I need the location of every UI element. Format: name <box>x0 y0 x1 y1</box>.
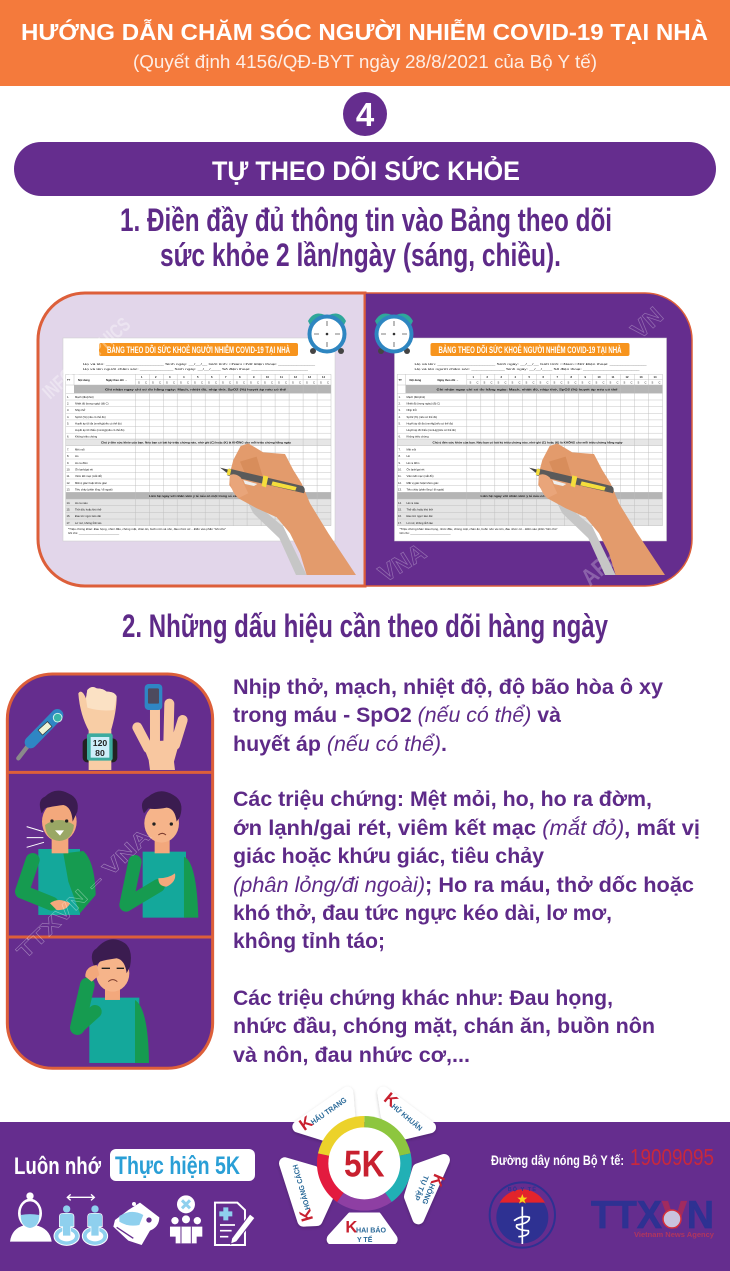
form table left: Tiêu chảy (phân lỏng / đi ngoài) <box>75 488 113 492</box>
form table right: 3 <box>500 375 502 379</box>
petal: Khai báo y tế <box>333 1217 392 1244</box>
watermark left panel: INFOGRAPHICS <box>39 314 135 404</box>
icon: no gathering <box>170 1195 202 1243</box>
form table left: 4 <box>183 375 185 379</box>
5K reminder: Luôn nhớ <box>14 1153 102 1180</box>
form table left: 7 <box>225 375 227 379</box>
form table left: 3. <box>67 408 69 412</box>
petal: Không tụ tập: TỤ TẬP <box>412 1174 431 1202</box>
illustration: person coughing <box>22 791 96 915</box>
form table left: Mất vị giác hoặc khứu giác <box>75 481 108 485</box>
petal: Khai báo y tế: K <box>345 1218 357 1237</box>
text block: symptoms: giác hoặc khứu giác, tiêu chảy <box>233 845 544 868</box>
text block: symptoms <box>233 788 700 953</box>
text block: symptoms: không tỉnh táo; <box>233 930 385 953</box>
form table right: Ngày theo dõi → <box>438 378 459 382</box>
form table left: 15. <box>66 508 70 512</box>
icon: fingertip oximeter <box>137 684 183 770</box>
icon: wrist blood pressure monitor: 120 <box>93 738 107 748</box>
form table right: Ho <box>406 454 410 458</box>
form table right: SpO2 (%) (nếu có thể đo) <box>406 415 437 419</box>
icon: hand washing <box>113 1202 159 1245</box>
form table right: 8 <box>570 375 572 379</box>
form table left: Ớn lạnh/gai rét <box>75 466 93 472</box>
form table left: 9 <box>253 375 255 379</box>
icon: health declaration <box>215 1203 255 1245</box>
form table right: Lơ mơ, không tỉnh táo <box>406 521 433 525</box>
panel: symptom illustrations <box>7 674 213 1068</box>
form table left: 11. <box>66 474 70 478</box>
form table left: BẢNG THEO DÕI SỨC KHOẺ NGƯỜI NHIỄM COVID-19 TẠI NHÀ <box>107 344 290 356</box>
form table right: 10 <box>598 375 601 379</box>
logo: Ministry of Health: BỘ Y TẾ <box>508 1185 537 1193</box>
form table left: 16. <box>66 514 70 518</box>
watermark right panel: VNA <box>374 538 431 588</box>
text block: vital signs: huyết áp (nếu có thể). <box>233 733 447 756</box>
section banner: TỰ THEO DÕI SỨC KHỎE <box>212 154 520 186</box>
form table right: 12 <box>626 375 629 379</box>
form table left: Đau tức ngực kéo dài <box>75 514 101 518</box>
form table left: Chú ý đến sức khỏe của bạn. Nếu bạn có bất kỳ triệu chứng nào, nhớ ghi (C) hoặc (K) là KHÔNG cho mỗi triệu chứng hằng ngày <box>101 440 292 444</box>
form table right: 9. <box>398 461 401 465</box>
form table left: SpO2 (%) (nếu có thể đo) <box>75 415 106 419</box>
form table right: 5 <box>528 375 530 379</box>
petal: Không tụ tập: HÔNG <box>420 1182 437 1206</box>
form table right: 7 <box>556 375 558 379</box>
form table right: 2 <box>486 375 488 379</box>
petal: Khẩu trang: HẨU TRANG <box>309 1095 348 1127</box>
form table right: 5. <box>398 422 401 426</box>
heading 1 <box>120 202 612 273</box>
form table right: Ghi nhận ngay chỉ số đo hằng ngày: Mạch, nhiệt độ, nhịp thở, SpO2 (%) huyết áp nếu có thể <box>436 386 618 392</box>
icon: wrist blood pressure monitor <box>78 687 117 770</box>
hotline: Đường dây nóng Bộ Y tế: <box>491 1152 624 1168</box>
illustration: person with flushed face <box>126 791 198 918</box>
form table right <box>394 338 666 541</box>
petal: Khẩu trang: K <box>295 1112 316 1135</box>
text block: other symptoms: Các triệu chứng khác như: Đau họng, <box>233 987 613 1010</box>
form table right: Đau tức ngực kéo dài <box>406 514 433 518</box>
form table left: 4. <box>67 415 69 419</box>
form table right: 14. <box>398 501 402 505</box>
form table left: 12 <box>294 375 297 379</box>
form table right: 3. <box>398 408 401 412</box>
form table left: Lơ mơ, không tỉnh táo <box>75 521 102 525</box>
form table right: Ghi chú: ___________________________ <box>400 531 451 535</box>
hotline <box>491 1144 714 1170</box>
form table left: Ho ra đờm <box>75 461 89 465</box>
icon: wrist blood pressure monitor: 80 <box>95 748 105 758</box>
form table left: *Triệu chứng khác: Đau họng, nhức đầu, chóng mặt, chán ăn, buồn nôn và nôn, đau nhức cơ... Điền vào phần "Ghi chú" <box>68 527 226 531</box>
form table left: 13. <box>66 488 70 492</box>
form table right: 1. <box>398 395 401 399</box>
petal: Khử khuẩn <box>380 1089 430 1134</box>
form table left: Không triệu chứng <box>75 434 98 438</box>
icons: 5K actions <box>10 1192 255 1245</box>
petal: Không tụ tập: K <box>426 1171 449 1190</box>
form table right: 2. <box>398 402 401 406</box>
form table right: Huyết áp tối thiểu (mmHg)(nếu có thể đo) <box>406 428 456 432</box>
form table left: 9. <box>67 461 69 465</box>
petal: Khẩu trang <box>295 1089 350 1135</box>
logo: TTXVN: TTXVN <box>591 1194 714 1237</box>
form table right: Chú ý đến sức khỏe của bạn. Nếu bạn có bất kỳ triệu chứng nào, nhớ ghi (C) hoặc (K) là KHÔNG cho mỗi triệu chứng hằng ngày <box>432 440 623 444</box>
clock left <box>308 313 346 354</box>
panel: afternoon form <box>365 293 692 591</box>
form table right: 13. <box>398 488 402 492</box>
header band <box>0 0 730 86</box>
form table left: Họ và tên người chăm sóc: _____________ Sinh ngày: __/__/____ Số điện thoại: ______________________ <box>83 367 309 371</box>
5K reminder: Thực hiện 5K <box>115 1152 240 1180</box>
form table right: SCSCSCSCSCSCSCSCSCSCSCSCSCSC <box>470 380 660 384</box>
petal: Không tụ tập <box>410 1160 449 1218</box>
ring <box>317 1116 412 1211</box>
form table right: 4. <box>398 415 401 419</box>
form table left: 10. <box>66 468 70 472</box>
form table left: 1 <box>141 375 143 379</box>
form table right: Nhiệt độ (trong ngày) (độ C) <box>406 402 440 406</box>
form table left <box>63 338 335 541</box>
form table left: 17. <box>66 521 70 525</box>
form table left: 3 <box>169 375 171 379</box>
form table right: Huyết áp tối đa (mmHg)(nếu có thể đo) <box>406 422 453 426</box>
form table left: Liên hệ ngay với nhân viên y tế nếu có một trong số các triệu chứng: <box>149 494 259 498</box>
form table right: 16. <box>398 514 402 518</box>
petal: Khai báo y tế: HAI BÁO <box>356 1226 386 1235</box>
form table right: Họ và tên: ______________________ Sinh ngày: __/__/__ Giới tính: □Nam □Nữ Điện thoại: ______________ <box>414 362 647 366</box>
panel: morning form <box>38 293 365 586</box>
form table left: 11 <box>280 375 283 379</box>
form table right: BẢNG THEO DÕI SỨC KHOẺ NGƯỜI NHIỄM COVID-19 TẠI NHÀ <box>438 344 622 356</box>
text block: symptoms: (phân lỏng/đi ngoài) ; Ho ra máu, thở dốc hoặc <box>233 874 694 897</box>
form table left: 12. <box>66 481 70 485</box>
form table right: TT <box>398 378 402 382</box>
text block: symptoms: Các triệu chứng: Mệt mỏi, ho, ho ra đờm, <box>233 788 652 811</box>
form table right: Mất vị giác hoặc khứu giác <box>406 481 439 485</box>
form table left: Huyết áp tối thiểu (mmHg)(nếu có thể đo) <box>75 428 125 432</box>
form table right: 8. <box>398 454 401 458</box>
form table right: Ho ra đờm <box>406 461 420 465</box>
form table left: Ghi nhận ngay chỉ số đo hằng ngày: Mạch, nhiệt độ, nhịp thở, SpO2 (%) huyết áp nếu có thể <box>105 386 287 392</box>
form table right: 15. <box>398 508 402 512</box>
form table left: Mạch (lần/phút) <box>75 395 94 399</box>
form table right: 9 <box>584 375 586 379</box>
hotline: 19009095 <box>630 1144 714 1170</box>
form table right: Nhịp thở <box>406 408 417 412</box>
form table right: Mạch (lần/phút) <box>406 395 425 399</box>
footer band <box>0 1122 730 1271</box>
subtitle: (Quyết định 4156/QĐ-BYT ngày 28/8/2021 của Bộ Y tế) <box>133 52 597 72</box>
logo: Ministry of Health <box>490 1182 555 1248</box>
form table left: Nhiệt độ (trong ngày) (độ C) <box>75 402 109 406</box>
form table right: 6 <box>542 375 544 379</box>
form table right: Họ và tên người chăm sóc: _____________ Sinh ngày: __/__/____ Số điện thoại: ______________________ <box>414 367 640 371</box>
hand with pen right <box>529 443 665 575</box>
form table left: 8. <box>67 454 69 458</box>
form table left: 14 <box>322 375 325 379</box>
form table left: 13 <box>308 375 311 379</box>
form table left: Nhịp thở <box>75 408 86 412</box>
form table right: Ớn lạnh/gai rét <box>406 466 425 472</box>
text block: symptoms: khó thở, đau tức ngực kéo dài, lơ mơ, <box>233 902 612 925</box>
text block: other symptoms: và nôn, đau nhức cơ,... <box>233 1044 470 1067</box>
text block: vital signs <box>233 676 663 756</box>
form table right: 1 <box>472 375 474 379</box>
form table left: Viêm kết mạc (mắt đỏ) <box>75 473 102 478</box>
form table left: 2. <box>67 402 69 406</box>
form table right: Ho ra máu <box>406 501 420 505</box>
form table left: SCSCSCSCSCSCSCSCSCSCSCSCSCSC <box>138 380 329 384</box>
hand with pen left <box>220 443 356 575</box>
form table right: 17. <box>398 521 402 525</box>
number badge 4: 4 <box>356 96 375 133</box>
petal: Khoảng cách: K <box>295 1207 317 1224</box>
form table left: Ho ra máu <box>75 501 88 505</box>
text block: symptoms: ớn lạnh/gai rét, viêm kết mạc (mắt đỏ), mất vị <box>233 817 700 840</box>
form table left: Huyết áp tối đa (mmHg)(nếu có thể đo) <box>75 422 122 426</box>
form table left: Ho <box>75 454 79 458</box>
text block: other symptoms: nhức đầu, chóng mặt, chán ăn, buồn nôn <box>233 1015 655 1038</box>
form table left: 6. <box>67 434 69 438</box>
petal: Khoảng cách: HOẢNG CÁCH <box>291 1163 312 1211</box>
petal: Khử khuẩn: HỬ KHUẨN <box>390 1102 424 1133</box>
form table left: 10 <box>266 375 269 379</box>
ring: 5K <box>344 1143 385 1185</box>
text block: vital signs: Nhịp thở, mạch, nhiệt độ, độ bão hòa ô xy <box>233 676 663 699</box>
form table right: Thở dốc hoặc khó thở <box>406 508 433 512</box>
number badge 4 <box>343 92 387 136</box>
form table right: Không triệu chứng <box>406 434 429 438</box>
form table right: Nội dung <box>410 378 422 382</box>
form table right: *Triệu chứng khác: Đau họng, nhức đầu, chóng mặt, chán ăn, buồn nôn và nôn, đau nhức cơ... Điền vào phần "Ghi chú" <box>400 527 558 531</box>
watermark right panel: APHICS <box>576 521 650 591</box>
form table right: 7. <box>398 448 401 452</box>
icon: distancing <box>54 1194 108 1245</box>
form table left: Họ và tên: ______________________ Sinh ngày: __/__/__ Giới tính: □Nam □Nữ Điện thoại: ______________ <box>83 362 316 366</box>
form table left: Ghi chú: ___________________________ <box>68 531 120 535</box>
form table right: 4 <box>514 375 516 379</box>
logo: TTXVN: Vietnam News Agency <box>634 1230 715 1239</box>
form table left: 14. <box>66 501 70 505</box>
watermark right panel: VN <box>626 302 669 344</box>
form table right: Tiêu chảy (phân lỏng / đi ngoài) <box>406 488 444 492</box>
form table left: 5 <box>197 375 199 379</box>
form table right: 10. <box>398 468 402 472</box>
watermark TTXVN: TTXVN – VNA <box>12 824 156 964</box>
form table left: 1. <box>67 395 69 399</box>
form table left: 7. <box>67 448 69 452</box>
form table right: 14 <box>654 375 657 379</box>
form table left: Ngày theo dõi → <box>106 378 128 382</box>
form table left: Thở dốc hoặc khó thở <box>75 508 102 512</box>
form table right: Mệt mỏi <box>406 448 416 452</box>
form table left: Nội dung <box>78 378 90 382</box>
petal: Khai báo y tế: Y TẾ <box>357 1234 373 1244</box>
illustration: person with headache <box>77 939 149 1063</box>
petal: Khử khuẩn: K <box>380 1089 402 1111</box>
petal: Khoảng cách <box>283 1163 327 1224</box>
text block: other symptoms <box>233 987 655 1067</box>
title: HƯỚNG DẪN CHĂM SÓC NGƯỜI NHIỄM COVID-19 TẠI NHÀ <box>21 17 708 45</box>
form table left: Mệt mỏi <box>75 448 85 452</box>
form table left: 6 <box>211 375 213 379</box>
form table right: Viêm kết mạc (mắt đỏ) <box>406 473 434 478</box>
5K reminder <box>14 1149 255 1181</box>
form table right: 12. <box>398 481 402 485</box>
5K wheel <box>283 1089 449 1244</box>
form table right: 11 <box>612 375 615 379</box>
icon: mask <box>10 1192 52 1242</box>
icon: thermometer <box>18 713 62 758</box>
form table left: 5. <box>67 422 69 426</box>
form table right: 11. <box>398 474 402 478</box>
form table left: 8 <box>239 375 241 379</box>
form table right: 6. <box>398 434 401 438</box>
form table left: TT <box>67 378 71 382</box>
heading 1: sức khỏe 2 lần/ngày (sáng, chiều). <box>160 237 561 273</box>
form table right: 13 <box>640 375 643 379</box>
watermark right panel <box>374 302 669 591</box>
text block: vital signs: trong máu - SpO2 (nếu có thể) và <box>233 704 561 727</box>
form table left: 2 <box>155 375 157 379</box>
section banner <box>14 142 716 196</box>
clock right <box>375 313 413 354</box>
form table right: Liên hệ ngay với nhân viên y tế nếu có: <box>480 494 546 498</box>
